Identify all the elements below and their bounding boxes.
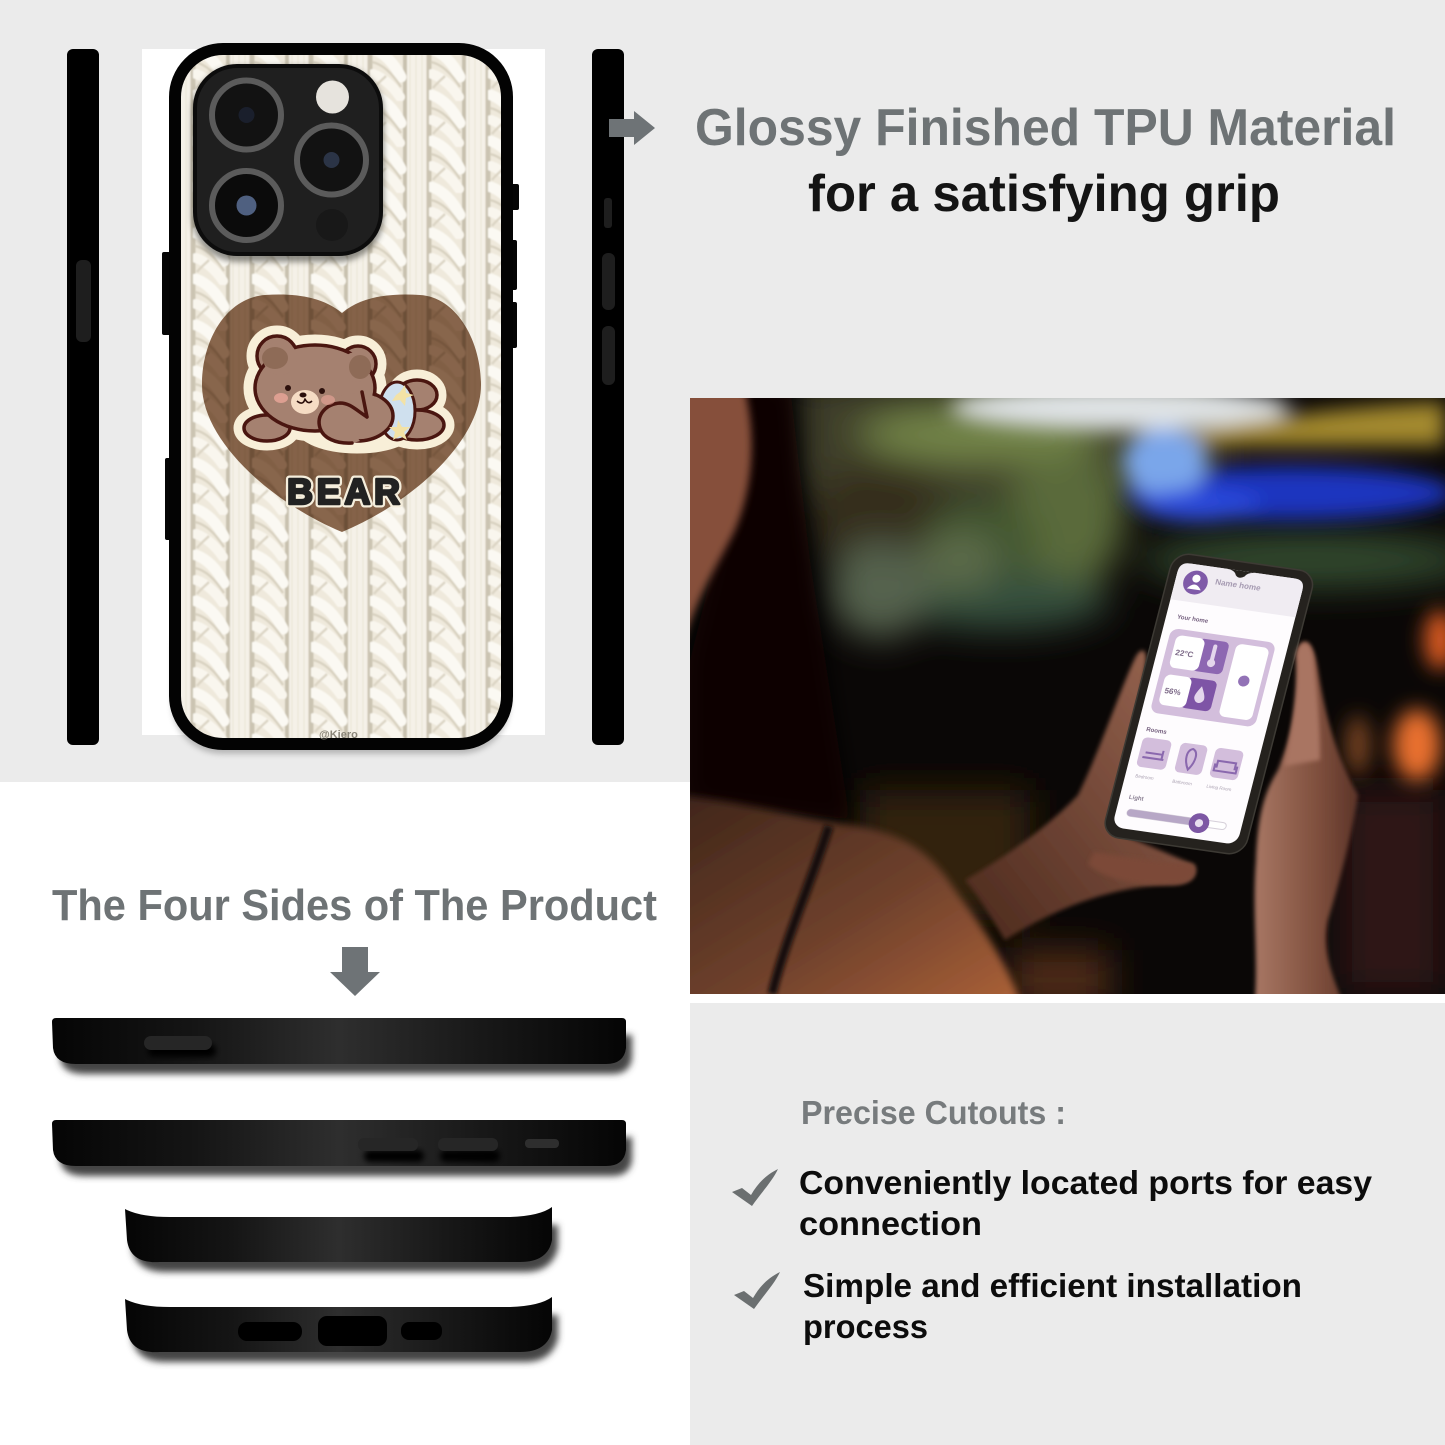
light slider	[1126, 808, 1227, 833]
lens bottom left	[212, 171, 281, 240]
side strip 1: single button	[52, 1018, 632, 1074]
lens top left	[212, 80, 281, 150]
checkmark 1	[732, 1169, 778, 1206]
bear head fill merging ears	[257, 341, 391, 439]
bullet 1: connection	[799, 1205, 982, 1242]
dress strap	[772, 826, 829, 994]
screen header text: Name home	[1214, 578, 1262, 593]
BEAR lettering: BEAR	[287, 471, 400, 512]
blurred background scenery	[800, 380, 1445, 1010]
room tiles	[1136, 737, 1244, 781]
side view: right edge of the case	[592, 49, 624, 745]
case side buttons	[162, 184, 519, 540]
headline line 2: for a satisfying grip	[808, 165, 1280, 223]
bear ears inner	[262, 347, 288, 369]
bear character	[243, 335, 445, 444]
section label: Your home	[1176, 615, 1209, 625]
bear rear legs	[244, 380, 444, 441]
room names	[1135, 773, 1232, 792]
bullet 2: process	[803, 1308, 928, 1345]
subheading: Precise Cutouts :	[801, 1094, 1066, 1131]
room names: Living Room	[1206, 784, 1232, 792]
product image white backing	[142, 49, 545, 735]
section heading: four sides: The Four Sides of The Product	[52, 881, 657, 930]
brown knit heart	[200, 290, 485, 535]
flash	[316, 80, 349, 114]
side view: left edge of the case	[67, 49, 99, 745]
small brand mark: @Kiero	[319, 729, 358, 741]
rooms label: Rooms	[1145, 727, 1168, 736]
bullet 1: Conveniently located ports for easy	[799, 1164, 1373, 1201]
climate panel: 56%	[1163, 686, 1182, 697]
panel: top-right grey backdrop	[690, 0, 1445, 398]
case drop shadow	[172, 600, 510, 754]
headline line 1: Glossy Finished TPU Material	[695, 99, 1396, 157]
climate panel	[1150, 628, 1276, 727]
right hand	[1255, 642, 1358, 1000]
checkmark 2	[734, 1272, 780, 1309]
side strip 3: top edge	[125, 1207, 558, 1272]
bear cream outline	[243, 335, 445, 444]
phone case back view	[162, 44, 519, 754]
lifestyle photo: hands holding phone	[680, 380, 1445, 1010]
climate panel: 22°C	[1174, 648, 1195, 659]
bear arm outline	[319, 392, 367, 443]
headline	[695, 99, 1396, 223]
BEAR lettering: BEAR	[287, 471, 400, 512]
arrow pointing down to sides	[330, 947, 380, 996]
bullet 2: Simple and efficient installation	[803, 1267, 1302, 1304]
screen header	[1170, 562, 1305, 617]
room names: Bathroom	[1172, 779, 1193, 786]
camera module	[192, 66, 384, 262]
bear face	[274, 385, 335, 414]
knit back texture	[170, 44, 512, 749]
side strip 4: port cutouts	[125, 1297, 558, 1362]
shoulder	[680, 795, 1022, 1005]
text block: precise cutouts	[732, 1094, 1373, 1345]
case frame	[175, 49, 507, 744]
fingers over phone edge	[1088, 643, 1320, 884]
smartphone	[1101, 552, 1316, 856]
sky, lake and hill highlights	[950, 386, 1445, 781]
diaper	[379, 382, 415, 440]
bullet 2	[803, 1267, 1302, 1345]
panel: bottom-right grey backdrop	[690, 1003, 1445, 1445]
notch	[1227, 568, 1258, 578]
woman's cheek	[690, 398, 757, 638]
diaper stars	[389, 385, 414, 440]
room tile icons	[1142, 748, 1238, 775]
camera shadow	[192, 66, 384, 262]
room names: Bedroom	[1135, 773, 1155, 781]
side strip 2: volume buttons and switch	[52, 1120, 632, 1176]
smartphone screen	[1112, 562, 1305, 845]
arrow pointing to headline	[609, 111, 655, 145]
avatar	[1183, 570, 1208, 594]
lidar	[316, 209, 348, 241]
light label: Light	[1128, 795, 1144, 803]
camera bump	[195, 66, 381, 254]
smartphone body	[1101, 552, 1316, 856]
bear body and head outline	[255, 336, 393, 441]
left hand	[965, 650, 1196, 940]
heart with bear sticker	[200, 290, 485, 535]
bear arm	[319, 403, 367, 444]
bullet 1	[799, 1164, 1373, 1242]
woman's hair and face	[770, 398, 848, 806]
panel: top-left grey backdrop	[0, 0, 690, 782]
lens right	[297, 126, 366, 194]
